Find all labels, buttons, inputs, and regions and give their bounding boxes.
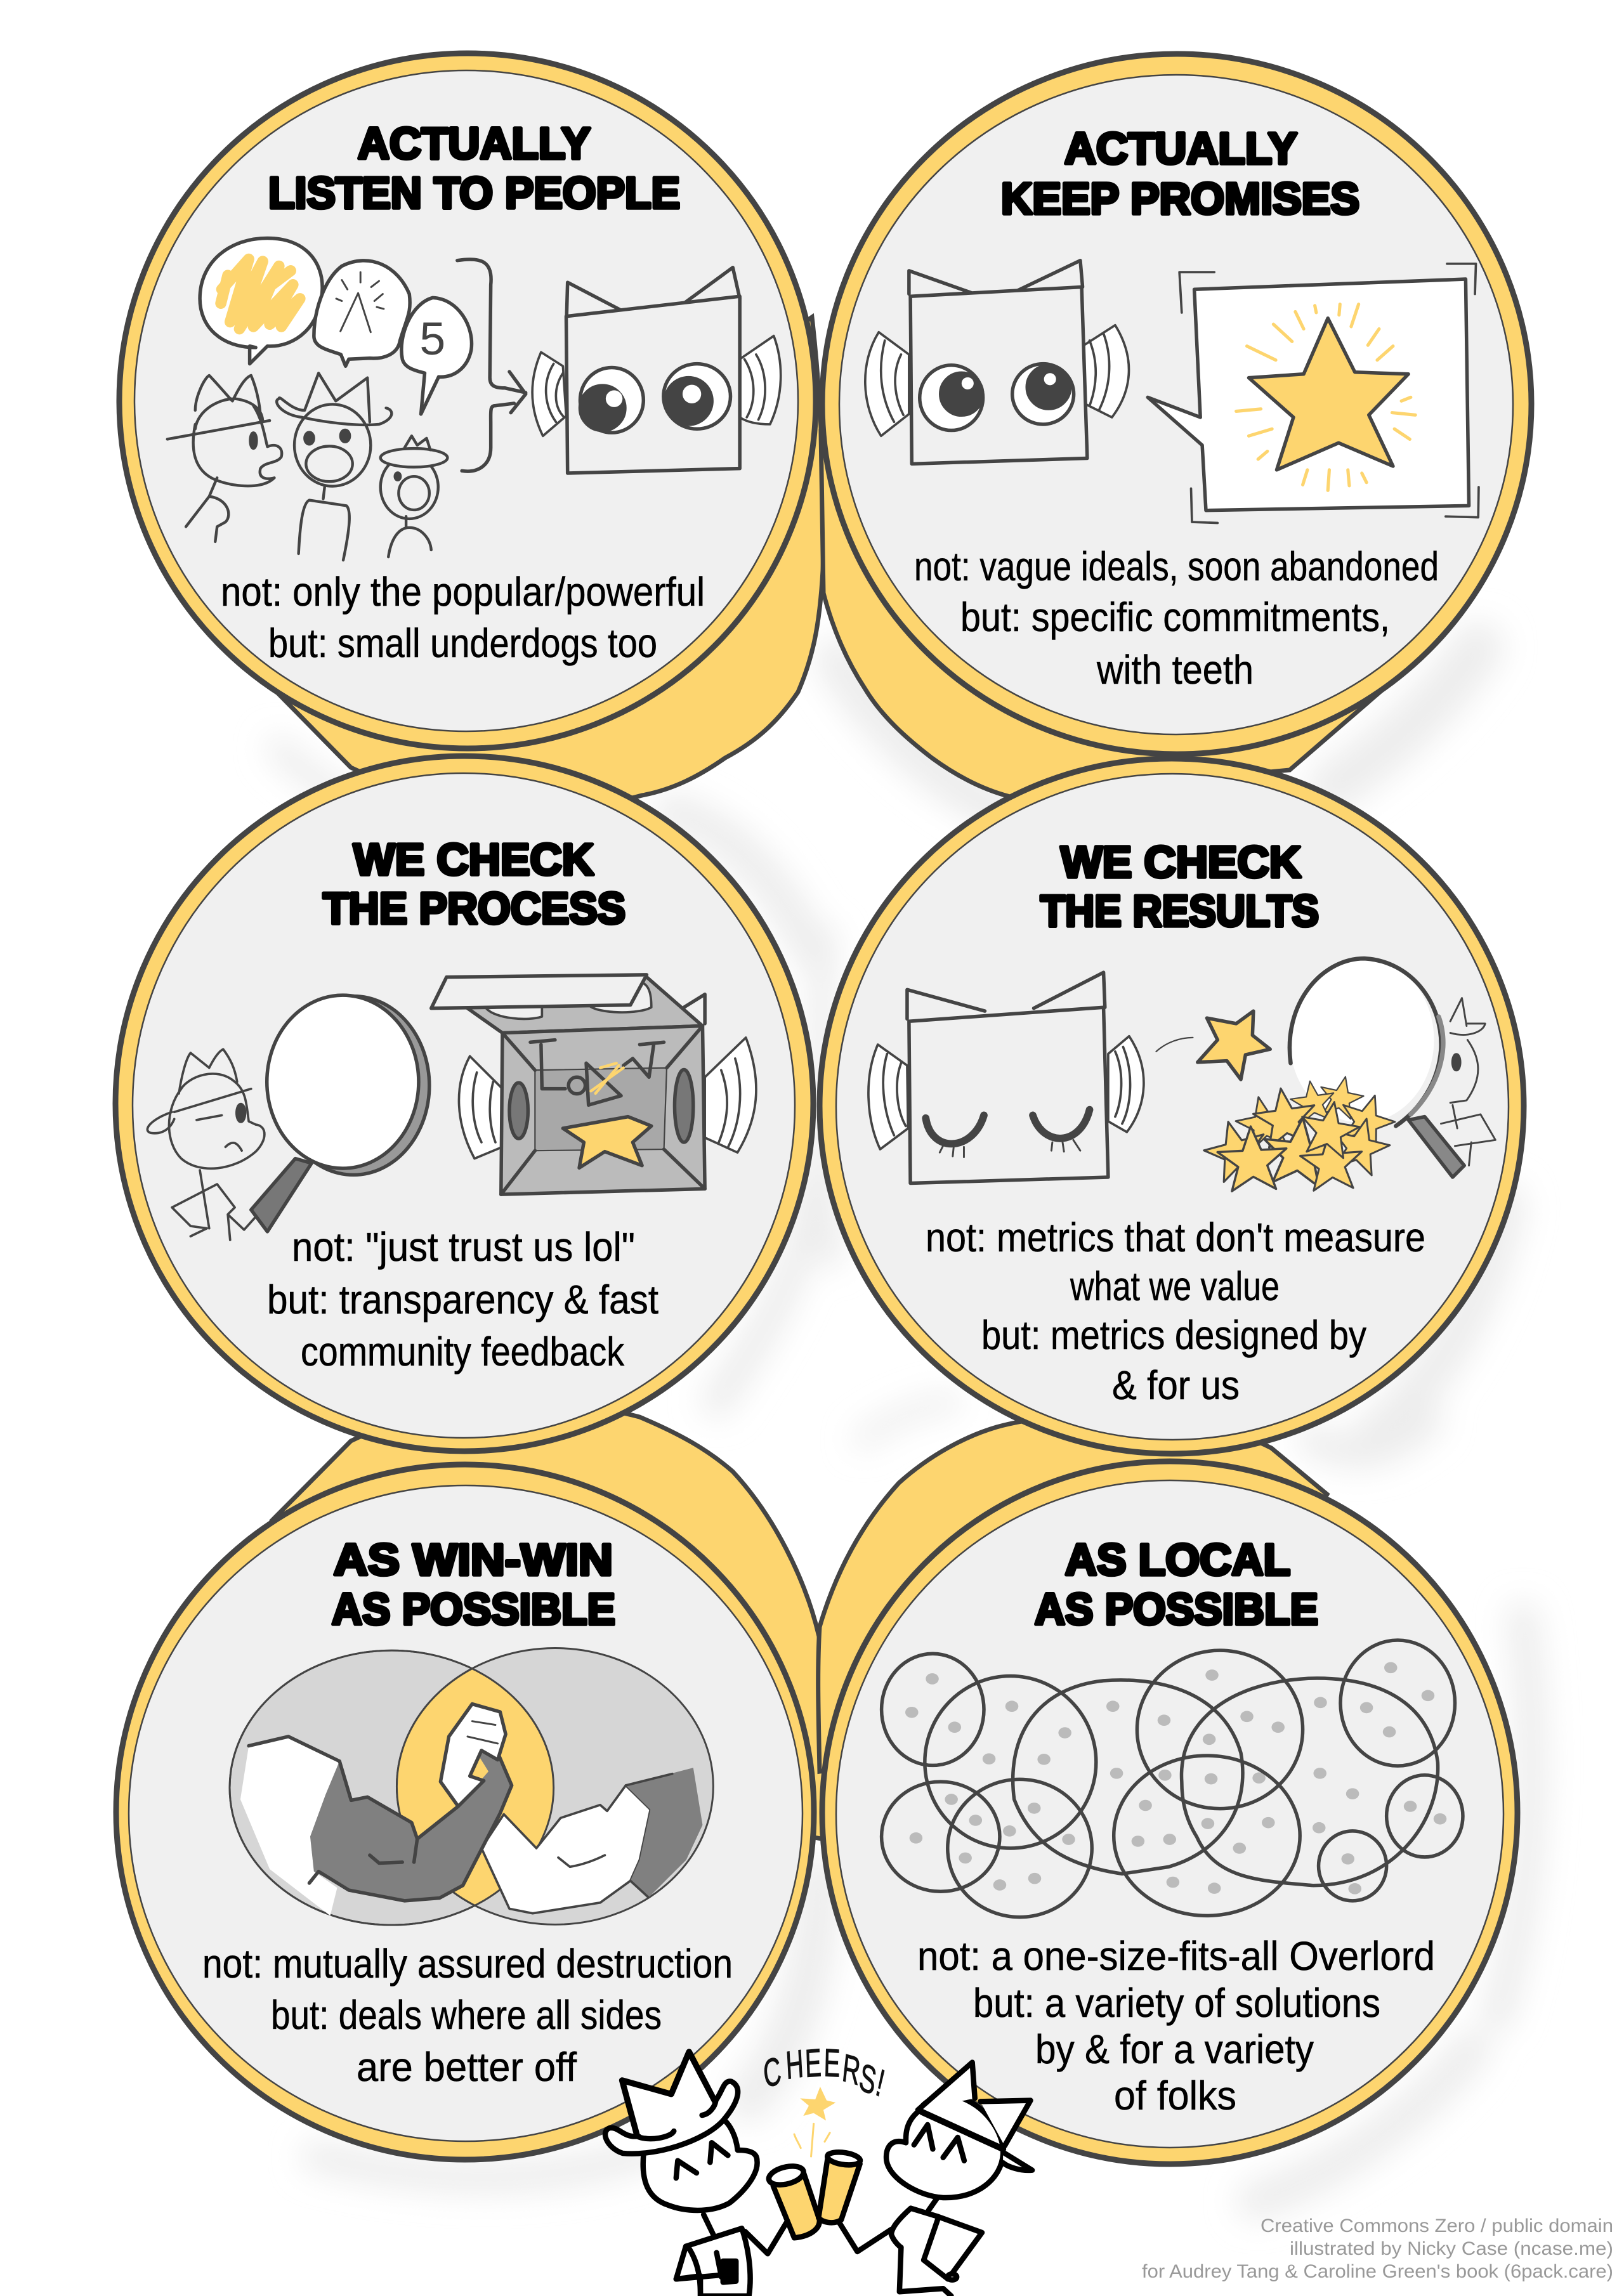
text: promises (914, 544, 1439, 693)
heading: as win-win as possible: AS WIN-WIN (334, 1535, 613, 1584)
cheers label: CHEERS! (761, 2040, 888, 2105)
heading: actually listen to people: LISTEN TO PEOPLE (268, 168, 680, 218)
robot (532, 352, 566, 436)
text: local (917, 1933, 1435, 2118)
heading: as local as possible: AS LOCAL (1065, 1535, 1290, 1584)
panel: actually listen to people (119, 53, 816, 748)
yellow cylinder back: top left (279, 317, 823, 807)
text: local: by & for a variety (1035, 2026, 1314, 2072)
heading: we check the results (1040, 837, 1319, 936)
panel: we check the process (115, 756, 813, 1451)
text: local: not: a one-size-fits-all Overlord (917, 1933, 1435, 1979)
yellow cylinder back: top right (821, 431, 1415, 797)
text: process: but: transparency & fast (267, 1277, 658, 1322)
panel: as local as possible (822, 1461, 1517, 2164)
text: promises: not: vague ideals, soon abandoned (914, 544, 1439, 589)
credits (1142, 2215, 1613, 2282)
panel: as win-win as possible (116, 1464, 814, 2160)
heading: actually listen to people: ACTUALLY (358, 119, 591, 168)
heading: actually keep promises (1001, 124, 1359, 223)
text: local: of folks (1114, 2073, 1236, 2118)
heading: as win-win as possible: AS POSSIBLE (332, 1584, 615, 1634)
cowboy person (277, 373, 391, 560)
cap person (167, 375, 282, 542)
heading: as local as possible (1035, 1535, 1318, 1634)
illustration: inspector and open box (147, 975, 756, 1240)
heading: we check the process: WE CHECK (353, 835, 594, 884)
heading: actually listen to people (268, 119, 680, 218)
small person (381, 455, 438, 519)
text: process: community feedback (301, 1329, 625, 1374)
heading: as win-win as possible (332, 1535, 615, 1634)
illustration: two characters toasting (605, 2052, 1032, 2296)
text: promises: but: specific commitments, (960, 594, 1390, 640)
text: results (926, 1215, 1425, 1408)
credits: Creative Commons Zero / public domain (1261, 2215, 1613, 2236)
text: promises: with teeth (1096, 647, 1254, 693)
text: local: but: a variety of solutions (973, 1980, 1380, 2026)
illustration: people talking to robot: 5 (419, 313, 445, 365)
heading: as local as possible: AS POSSIBLE (1035, 1584, 1318, 1634)
yellow cylinder back: bottom left (272, 1403, 824, 1839)
text: process: not: "just trust us lol" (292, 1224, 635, 1270)
heading: actually keep promises: ACTUALLY (1064, 124, 1297, 173)
panel: actually keep promises (822, 54, 1531, 754)
credits: illustrated by Nicky Case (ncase.me) (1290, 2238, 1613, 2259)
text: results: not: metrics that don't measure (926, 1215, 1425, 1260)
text: listen (221, 569, 705, 666)
background watercolor shadows (279, 647, 1531, 2201)
text: results: but: metrics designed by (981, 1312, 1366, 1358)
text: results: what we value (1070, 1263, 1280, 1309)
illustration: sleeping robot and stars (868, 957, 1495, 1192)
heading: actually keep promises: KEEP PROMISES (1001, 174, 1359, 223)
illustration: venn diagram arm wrestling (230, 1648, 713, 1925)
heading: we check the process (323, 835, 625, 933)
yellow cylinder back: bottom right (818, 1415, 1327, 1771)
text: process (267, 1224, 658, 1374)
text: listen: not: only the popular/powerful (221, 569, 705, 615)
illustration: people talking to robot (167, 238, 781, 560)
panel: we check the results (820, 759, 1524, 1454)
text: win-win: not: mutually assured destruction (202, 1941, 733, 1986)
text: win-win (202, 1941, 733, 2090)
credits: for Audrey Tang & Caroline Green's book (6pack.care) (1142, 2261, 1613, 2282)
illustration: robot promising star (865, 261, 1479, 523)
heading: we check the process: THE PROCESS (323, 884, 625, 933)
text: win-win: but: deals where all sides (271, 1992, 662, 2038)
heading: we check the results: THE RESULTS (1040, 886, 1319, 936)
illustration: overlapping communities (882, 1640, 1463, 1917)
text: win-win: are better off (357, 2044, 577, 2090)
text: results: & for us (1112, 1362, 1240, 1408)
heading: we check the results: WE CHECK (1061, 837, 1301, 887)
text: listen: but: small underdogs too (268, 620, 657, 666)
